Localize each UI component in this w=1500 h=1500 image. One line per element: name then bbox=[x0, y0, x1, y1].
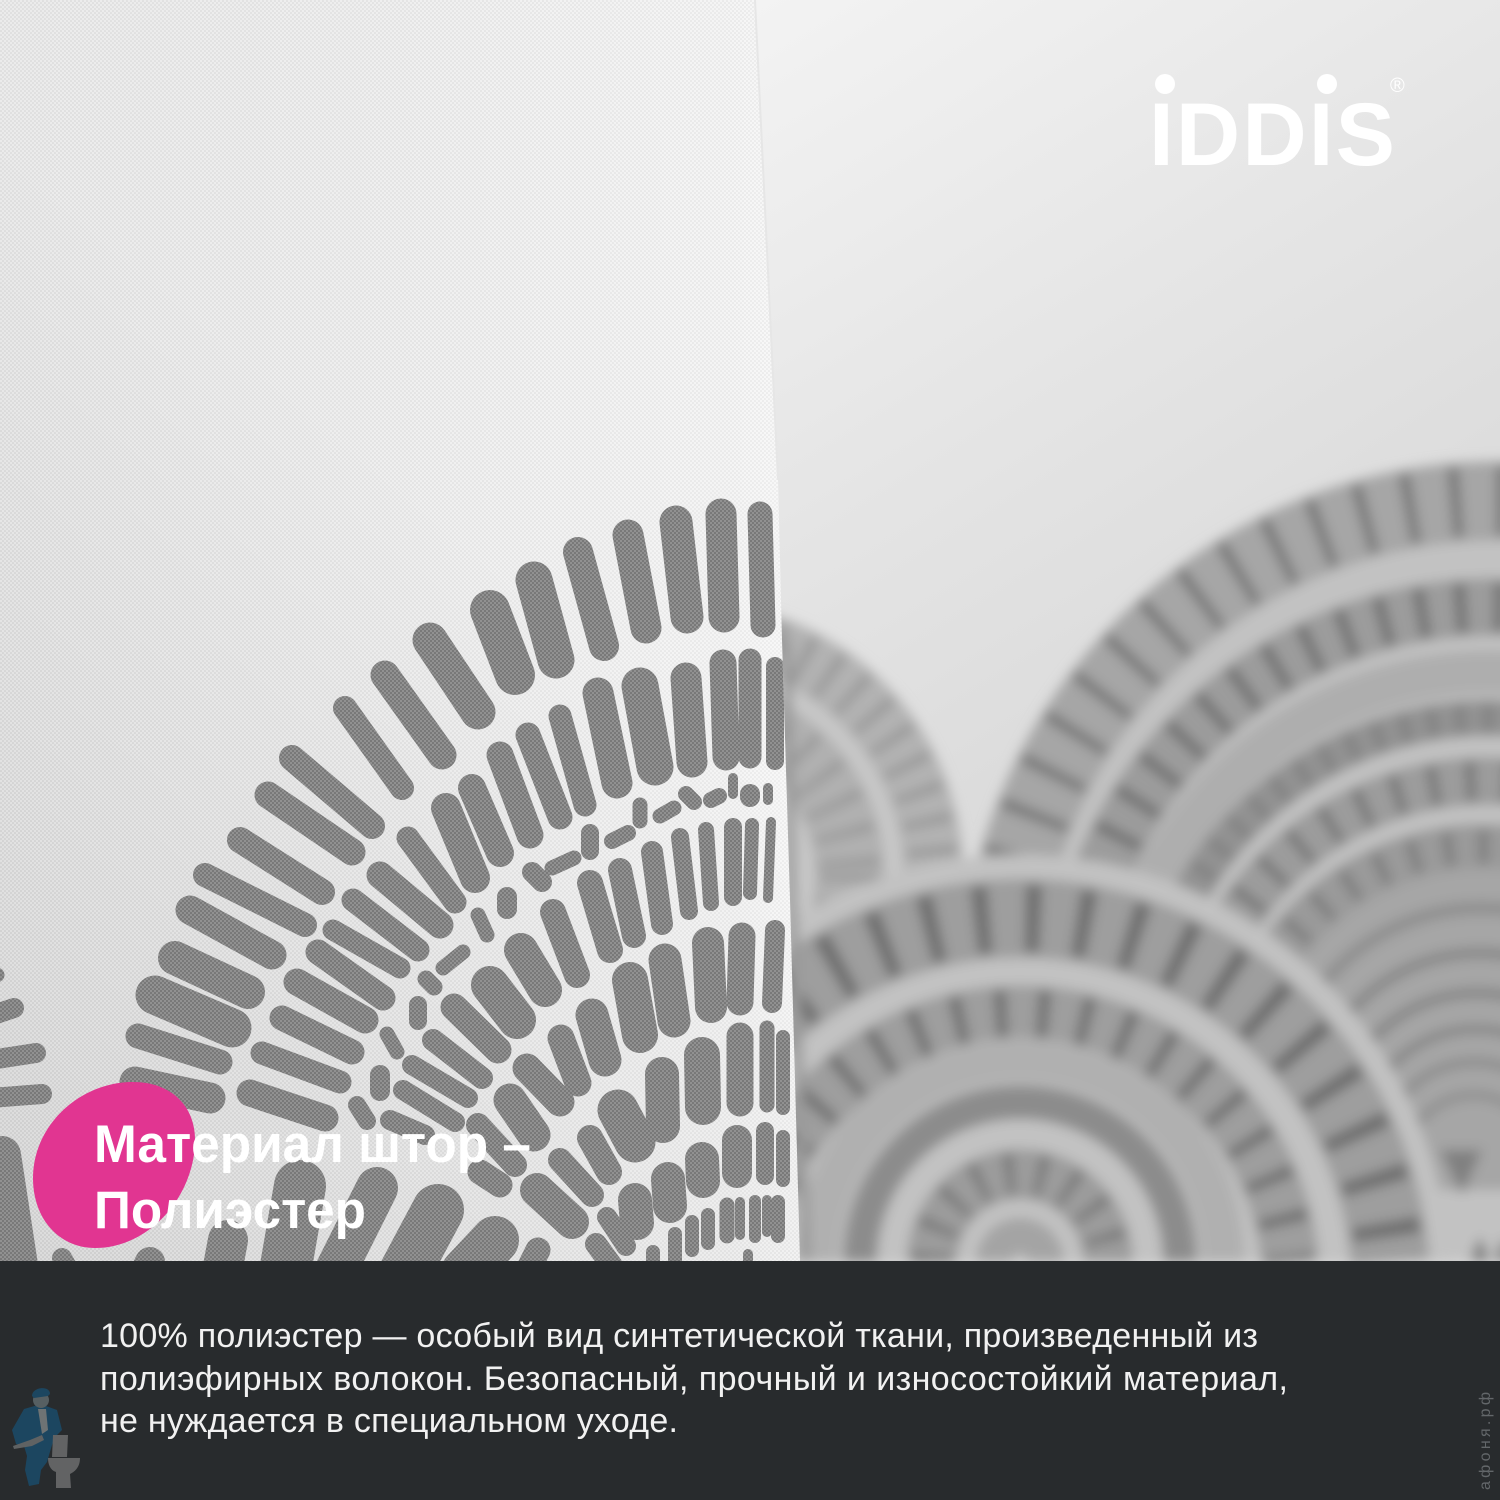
pink blob accent bbox=[33, 1082, 195, 1248]
fan: small rear fan near fold bbox=[418, 603, 962, 1147]
fabric background bbox=[0, 0, 800, 1261]
description text: 100% полиэстер — особый вид синтетической ткани, произведенный из bbox=[100, 1317, 1258, 1355]
fold line bbox=[755, 0, 778, 480]
fan: large right fan bbox=[960, 461, 1500, 1261]
heading bbox=[94, 1115, 531, 1240]
petal row 6 bbox=[596, 1131, 783, 1266]
description text: не нуждается в специальном уходе. bbox=[100, 1402, 678, 1440]
petal row 4 bbox=[478, 930, 775, 1185]
fan: left edge petals bbox=[0, 975, 42, 1272]
description text: полиэфирных волокон. Безопасный, прочный и износостойкий материал, bbox=[100, 1360, 1288, 1398]
fabric weave texture bbox=[0, 0, 800, 1261]
icon: plumber with toilet bbox=[12, 1388, 80, 1488]
panel: sharp foreground curtain bbox=[0, 0, 800, 1272]
petal row 1 bbox=[135, 514, 763, 1098]
logo: IDDIS: ® bbox=[1390, 75, 1405, 97]
petal row 7 bbox=[653, 1200, 778, 1270]
fan: front centre fan bbox=[591, 855, 1449, 1262]
petal row 5 bbox=[537, 1028, 783, 1222]
petal row 3 bbox=[390, 822, 771, 1135]
fold shadow bbox=[786, 640, 806, 1261]
large lower petals bbox=[62, 1186, 538, 1272]
heading: Полиэстер bbox=[94, 1181, 366, 1240]
watermark: афоня.рф bbox=[1477, 1392, 1494, 1490]
small dot ring bbox=[357, 778, 768, 1121]
petal row 2 bbox=[250, 660, 775, 1118]
heading: Материал штор – bbox=[94, 1115, 531, 1174]
description text bbox=[100, 1317, 1288, 1440]
logo: IDDIS: IDDIS bbox=[1149, 84, 1395, 184]
panel: dark description band bbox=[0, 1261, 1500, 1500]
background: blurred right curtain bbox=[700, 0, 1500, 1261]
fan: main petal pattern bbox=[0, 514, 783, 1272]
blurred fan patterns behind bbox=[418, 461, 1500, 1262]
